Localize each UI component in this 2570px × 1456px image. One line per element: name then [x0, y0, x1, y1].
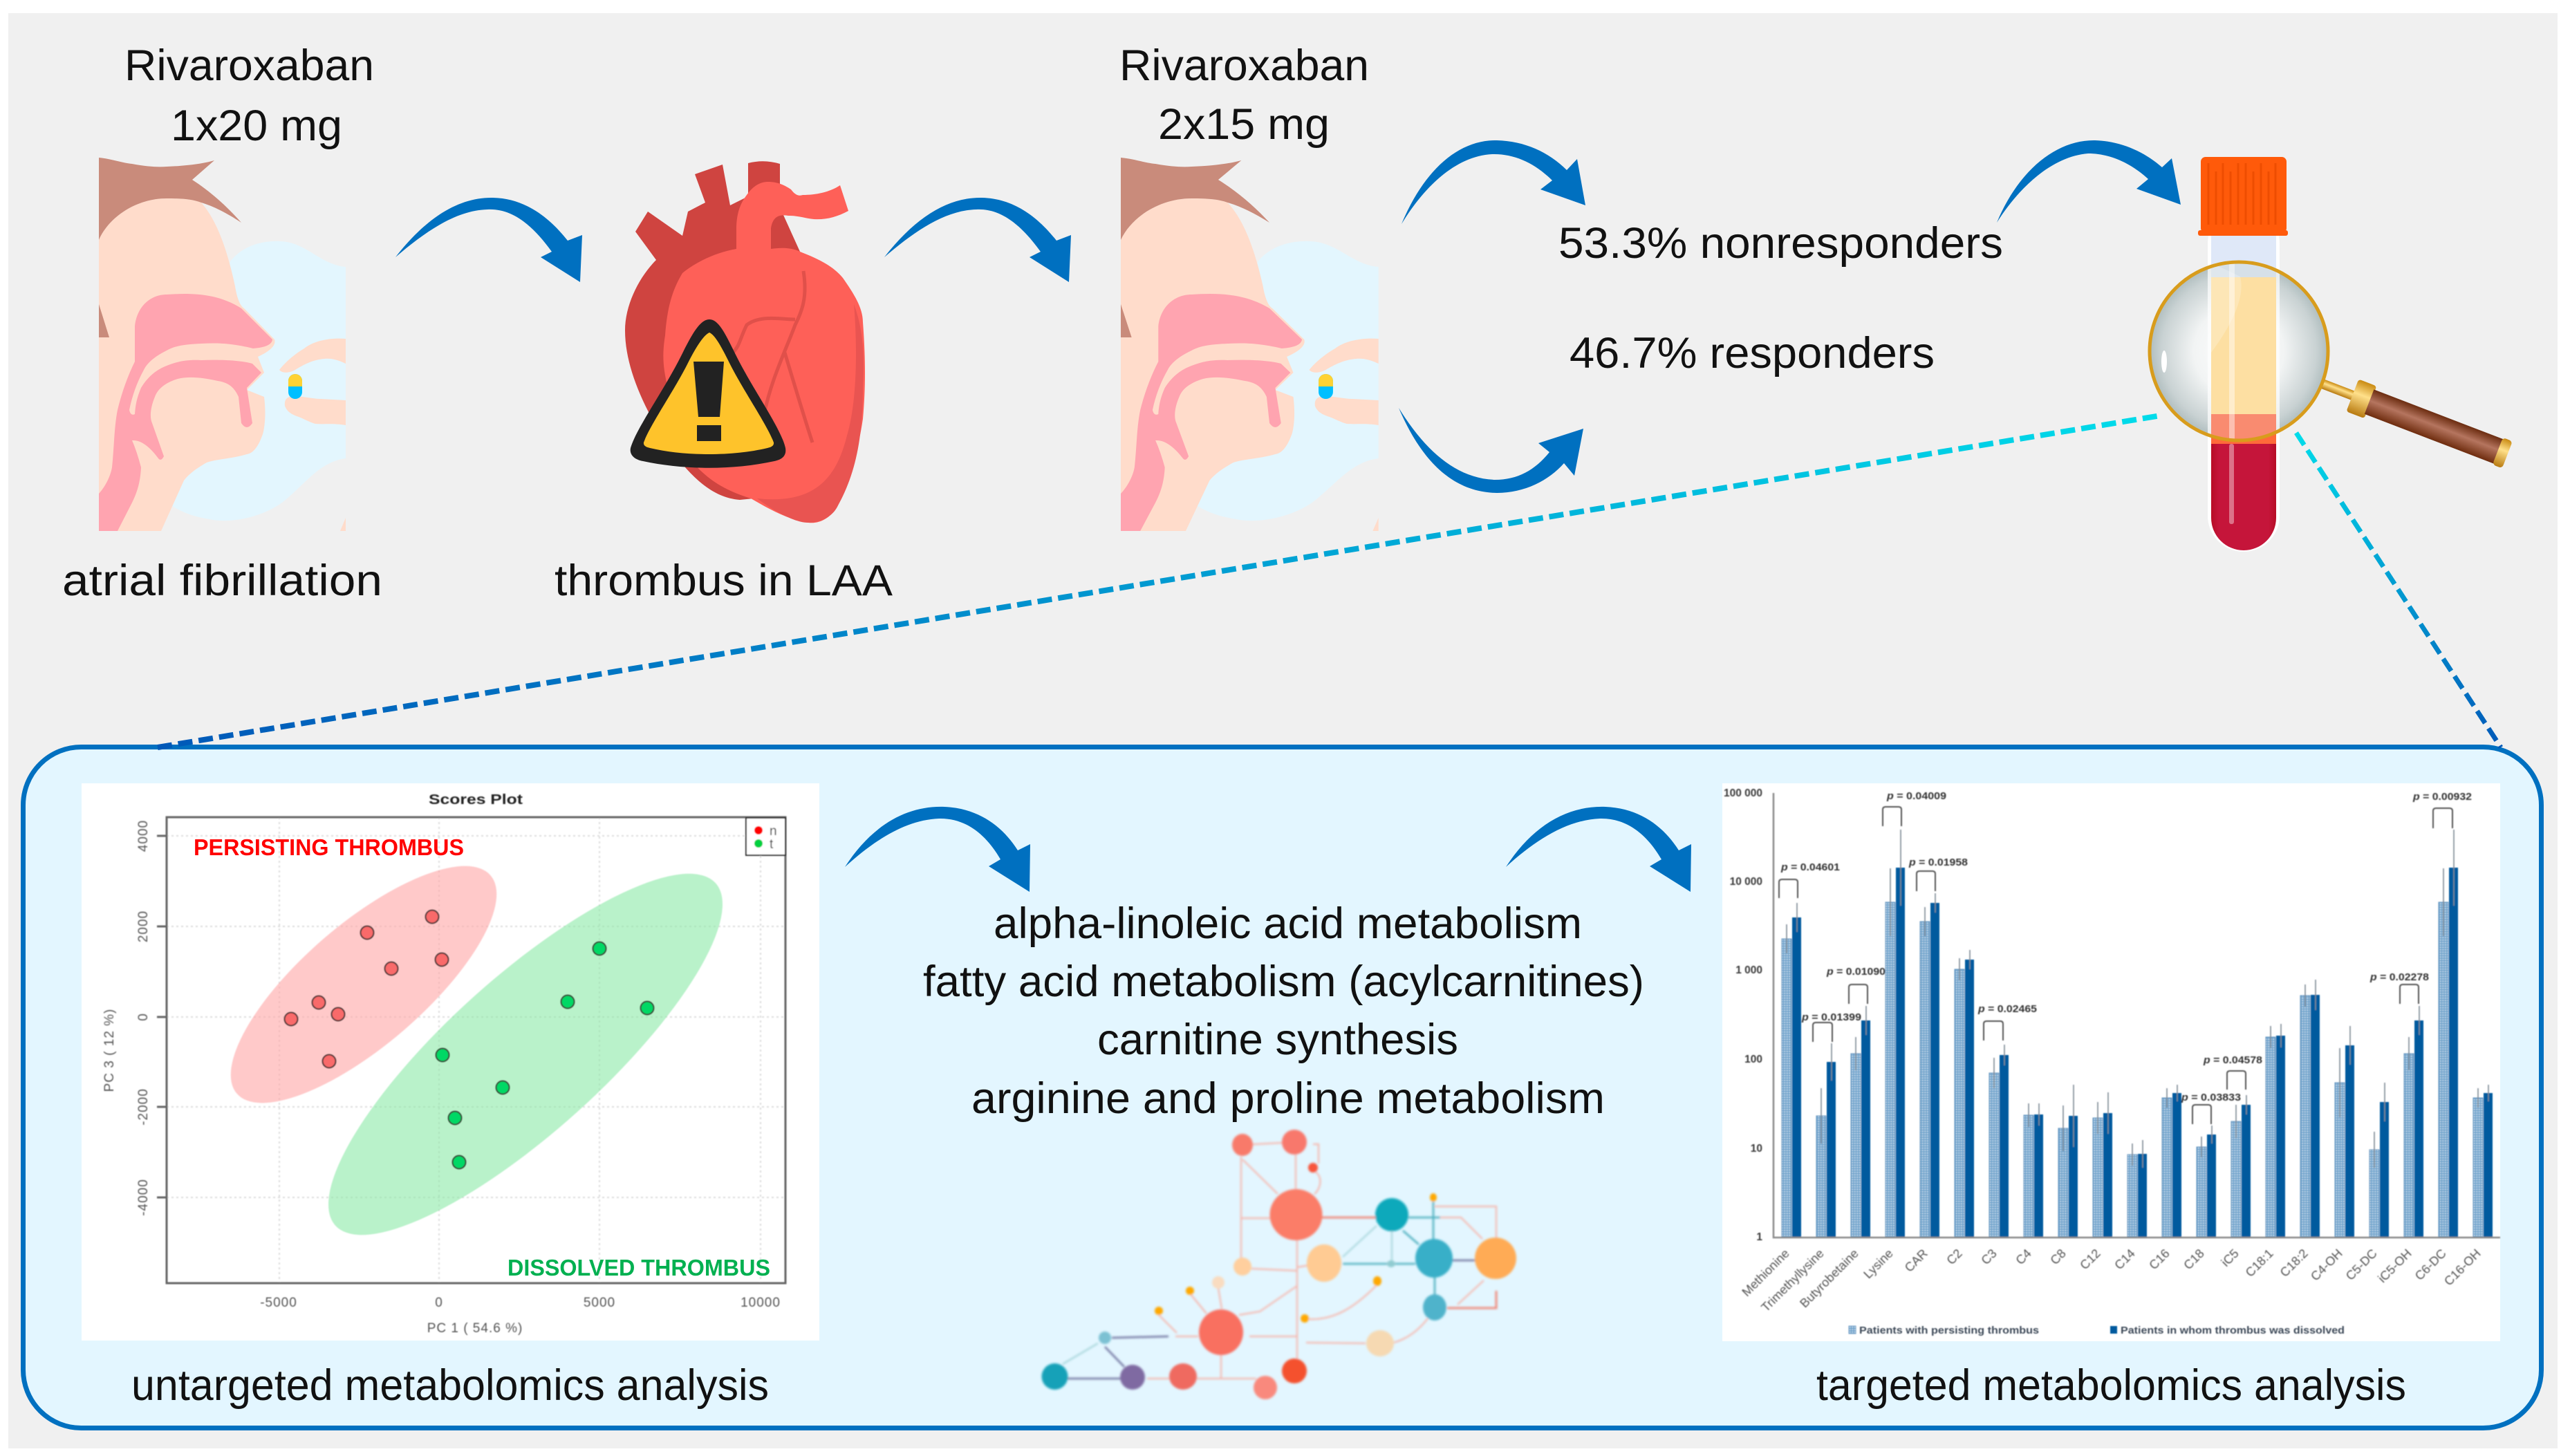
panel: analysis results [24, 747, 2542, 1428]
y axis labels: 100 000 [1724, 787, 1762, 799]
category labels: iC5-OH [2375, 1247, 2414, 1285]
arrow: to thrombus [395, 198, 582, 282]
label: Rivaroxaban 1x20 mg: 1x20 mg [171, 102, 342, 150]
plot title: Scores Plot [429, 792, 523, 808]
significance brackets [1779, 807, 2452, 1124]
label: Rivaroxaban 2x15 mg: 2x15 mg [1158, 100, 1330, 149]
label: targeted metabolomics analysis: targeted metabolomics analysis [1816, 1361, 2406, 1410]
axis labels: 5000 [584, 1296, 615, 1310]
axis labels: 2000 [136, 911, 151, 942]
axis labels: PC 3 ( 12 %) [102, 1009, 117, 1092]
p values: p = 0.02465 [1977, 1003, 2037, 1015]
y axis labels: 1 000 [1735, 964, 1762, 976]
category labels: C18:2 [2278, 1247, 2311, 1280]
label: 53.3% nonresponders: 53.3% nonresponders [1558, 219, 2003, 268]
arrow: to nonresponders [1402, 140, 1585, 224]
category labels: Lysine [1861, 1247, 1896, 1281]
category labels: C2 [1944, 1247, 1965, 1267]
dashed connector: tube to panel right [2296, 433, 2501, 747]
category labels: iC5 [2219, 1247, 2242, 1269]
category labels: C14 [2112, 1247, 2138, 1272]
category labels: Methionine [1739, 1247, 1792, 1299]
category labels: C5-DC [2343, 1247, 2380, 1283]
arrow: to responders [1399, 408, 1583, 493]
label: atrial fibrillation: atrial fibrillation [62, 557, 382, 605]
label: dissolved thrombus: DISSOLVED THROMBUS [508, 1255, 770, 1280]
axis labels: 0 [136, 1013, 151, 1021]
legend: n / t: t [770, 837, 774, 852]
p values: p = 0.04578 [2203, 1054, 2262, 1066]
text block: metabolic pathways [923, 899, 1644, 1123]
p values: p = 0.01399 [1801, 1011, 1861, 1023]
icon: patient swallowing pill [99, 158, 346, 531]
axis labels: PC 1 ( 54.6 %) [427, 1321, 523, 1336]
chart: PCA scores plot [82, 783, 819, 1341]
category labels: C18:1 [2243, 1247, 2276, 1280]
icon: heart with warning sign [625, 161, 865, 523]
p values: p = 0.02278 [2369, 971, 2429, 983]
text block: metabolic pathways: alpha-linoleic acid metabolism [994, 899, 1582, 948]
axis labels: 0 [435, 1296, 443, 1310]
label: Rivaroxaban 1x20 mg: Rivaroxaban [124, 41, 374, 90]
label: Rivaroxaban 1x20 mg [124, 41, 374, 150]
bars: persisting thrombus [1782, 902, 2483, 1238]
arrow: to targeted analysis [1506, 807, 1691, 892]
label: persisting thrombus: PERSISTING THROMBUS [194, 834, 464, 860]
category labels: C4 [2013, 1247, 2034, 1267]
p values: p = 0.03833 [2181, 1092, 2241, 1103]
y axis labels: 10 000 [1730, 876, 1762, 888]
axis labels: -2000 [136, 1088, 151, 1126]
category labels: C4-OH [2308, 1247, 2345, 1283]
arrow: to pathways [845, 807, 1030, 892]
points: red group [285, 910, 448, 1067]
y axis labels [1724, 787, 1762, 1243]
category labels: C18 [2181, 1247, 2207, 1272]
y axis labels: 100 [1744, 1054, 1762, 1065]
category labels: C3 [1978, 1247, 2000, 1267]
legend: n / t [746, 818, 785, 855]
dashed connector: tube to panel left [158, 416, 2161, 747]
label: untargeted metabolomics analysis: untargeted metabolomics analysis [131, 1361, 769, 1410]
text block: metabolic pathways: arginine and proline metabolism [971, 1074, 1605, 1123]
p values: p = 0.01958 [1908, 857, 1968, 868]
axis labels: -5000 [260, 1296, 297, 1310]
category labels: Butyrobetaine [1797, 1247, 1861, 1310]
bars: thrombus dissolved [1792, 868, 2493, 1238]
label: Rivaroxaban 2x15 mg [1119, 41, 1369, 149]
chart: targeted metabolite bar chart [1722, 783, 2500, 1341]
chart legend: Patients with persisting thrombus [1859, 1325, 2039, 1336]
diagram: metabolic pathway network [1041, 1130, 1516, 1399]
points: green group [436, 942, 654, 1168]
label: Rivaroxaban 2x15 mg: Rivaroxaban [1119, 41, 1369, 90]
error bars [1787, 830, 2488, 1168]
axis labels: 10000 [741, 1296, 781, 1310]
legend: n / t: n [770, 824, 777, 839]
label: 46.7% responders: 46.7% responders [1570, 329, 1935, 377]
chart legend [1849, 1325, 2345, 1336]
p values [1780, 790, 2472, 1103]
text block: metabolic pathways: carnitine synthesis [1097, 1016, 1458, 1064]
arrow: to blood tube [1997, 140, 2181, 223]
axis labels: 4000 [136, 820, 151, 852]
y axis labels: 1 [1756, 1231, 1762, 1243]
category labels: Trimethyllysine [1758, 1247, 1827, 1314]
axis labels: -4000 [136, 1179, 151, 1216]
category labels: C16 [2146, 1247, 2172, 1272]
text block: metabolic pathways: fatty acid metabolism (acylcarnitines) [923, 958, 1644, 1006]
p values: p = 0.04601 [1780, 861, 1840, 873]
y axis labels: 10 [1751, 1143, 1762, 1155]
ellipse: persisting thrombus group [197, 829, 530, 1140]
category labels: C8 [2047, 1247, 2069, 1267]
category labels: C6-DC [2412, 1247, 2449, 1283]
category labels: C12 [2077, 1247, 2103, 1272]
label: thrombus in LAA: thrombus in LAA [555, 557, 893, 605]
p values: p = 0.00932 [2412, 791, 2472, 803]
icon: blood tube with magnifier [2149, 157, 2513, 552]
category labels [1739, 1247, 2484, 1314]
category labels: C16-OH [2441, 1247, 2484, 1289]
p values: p = 0.01090 [1826, 966, 1885, 978]
chart legend: Patients in whom thrombus was dissolved [2121, 1325, 2345, 1336]
p values: p = 0.04009 [1886, 790, 1946, 802]
arrow: to second dose [884, 198, 1071, 282]
icon: patient swallowing pill, second dose [1121, 158, 1379, 531]
category labels: CAR [1902, 1247, 1930, 1275]
ellipse: dissolved thrombus group [283, 825, 767, 1283]
axis labels [102, 820, 781, 1336]
